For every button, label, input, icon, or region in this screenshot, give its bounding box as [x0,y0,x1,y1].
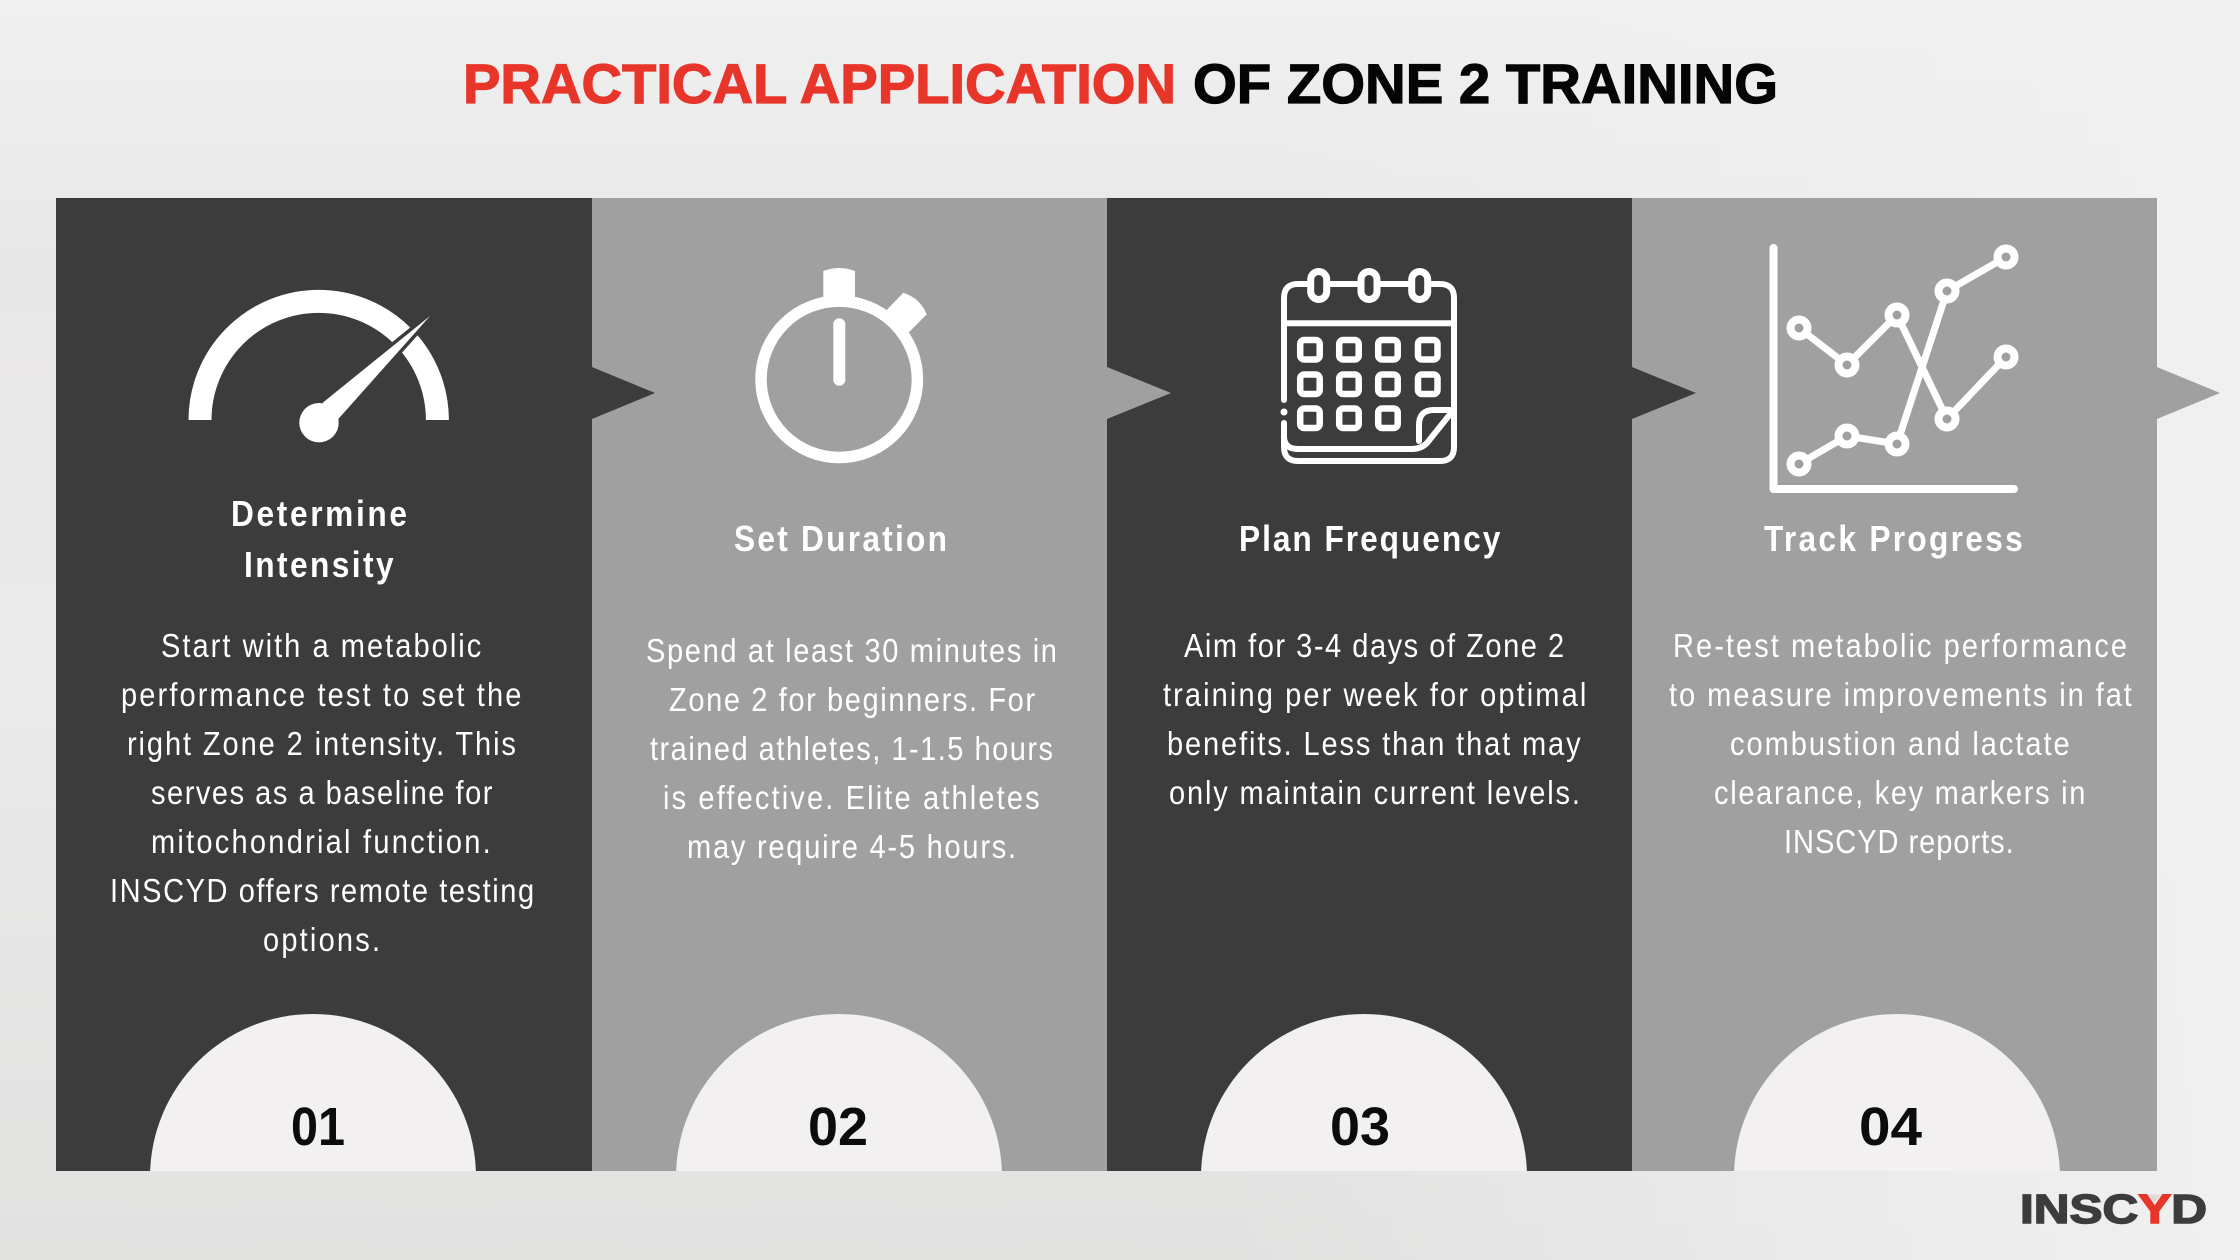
number badge: 04: 04 [1859,1097,1922,1157]
title [463,52,1778,115]
number badge: 01 [150,1014,476,1177]
panel: 03 plan frequency [1107,198,1696,1177]
text block: plan frequency: Aim for 3-4 days of Zone 2 [1184,627,1564,664]
icon: stopwatch [761,268,927,457]
text block: determine intensity [110,627,534,958]
heading: plan frequency: Plan Frequency [1239,519,1500,559]
heading: set duration: Set Duration [734,519,947,559]
text block: track progress [1669,627,2132,860]
heading: track progress: Track Progress [1764,519,2023,559]
icon: speedometer gauge [200,301,437,442]
heading: determine intensity [231,494,407,585]
text block: set duration: Zone 2 for beginners. For [669,681,1035,718]
number badge: 03 [1201,1014,1527,1177]
text block: plan frequency: benefits. Less than that may [1167,725,1581,762]
text block: track progress: INSCYD reports. [1784,823,2014,860]
number badge: 01: 01 [291,1097,345,1157]
icon: calendar [1280,272,1454,461]
text block: set duration: trained athletes, 1-1.5 hours [650,730,1053,767]
heading: determine intensity: Determine [231,494,407,534]
text block: set duration: Spend at least 30 minutes in [646,632,1057,669]
text block: determine intensity: options. [263,921,380,958]
text block: determine intensity: performance test to set the [121,676,521,713]
text block: plan frequency [1163,627,1586,811]
panel: 01 determine intensity [56,198,655,1177]
text block: determine intensity: mitochondrial function. [151,823,491,860]
text block: track progress: combustion and lactate [1730,725,2070,762]
text block: set duration: may require 4-5 hours. [687,828,1016,865]
text block: determine intensity: serves as a baseline for [151,774,492,811]
number badge: 03: 03 [1330,1097,1390,1157]
text block: plan frequency: only maintain current levels. [1169,774,1580,811]
icon: line chart [1774,248,2014,489]
text block: track progress: Re-test metabolic performance [1673,627,2127,664]
logo: INSCYD: INSC YD [2020,1186,2207,1232]
text block: determine intensity: right Zone 2 intensity. This [127,725,516,762]
panel: 04 track progress [1632,198,2220,1177]
title: PRACTICAL APPLICATION [463,52,1176,115]
panel: 02 set duration [592,198,1171,1177]
text block: plan frequency: training per week for optimal [1163,676,1586,713]
title: OF ZONE 2 TRAINING [1193,52,1778,115]
text block: track progress: to measure improvements in fat [1669,676,2132,713]
text block: track progress: clearance, key markers in [1714,774,2085,811]
heading: determine intensity: Intensity [244,545,394,585]
text block: determine intensity: INSCYD offers remote testing [110,872,534,909]
text block: determine intensity: Start with a metabolic [161,627,481,664]
text block: set duration: is effective. Elite athletes [663,779,1040,816]
number badge: 04 [1734,1014,2060,1177]
text block: set duration [646,632,1057,865]
number badge: 02 [676,1014,1002,1177]
number badge: 02: 02 [808,1097,868,1157]
